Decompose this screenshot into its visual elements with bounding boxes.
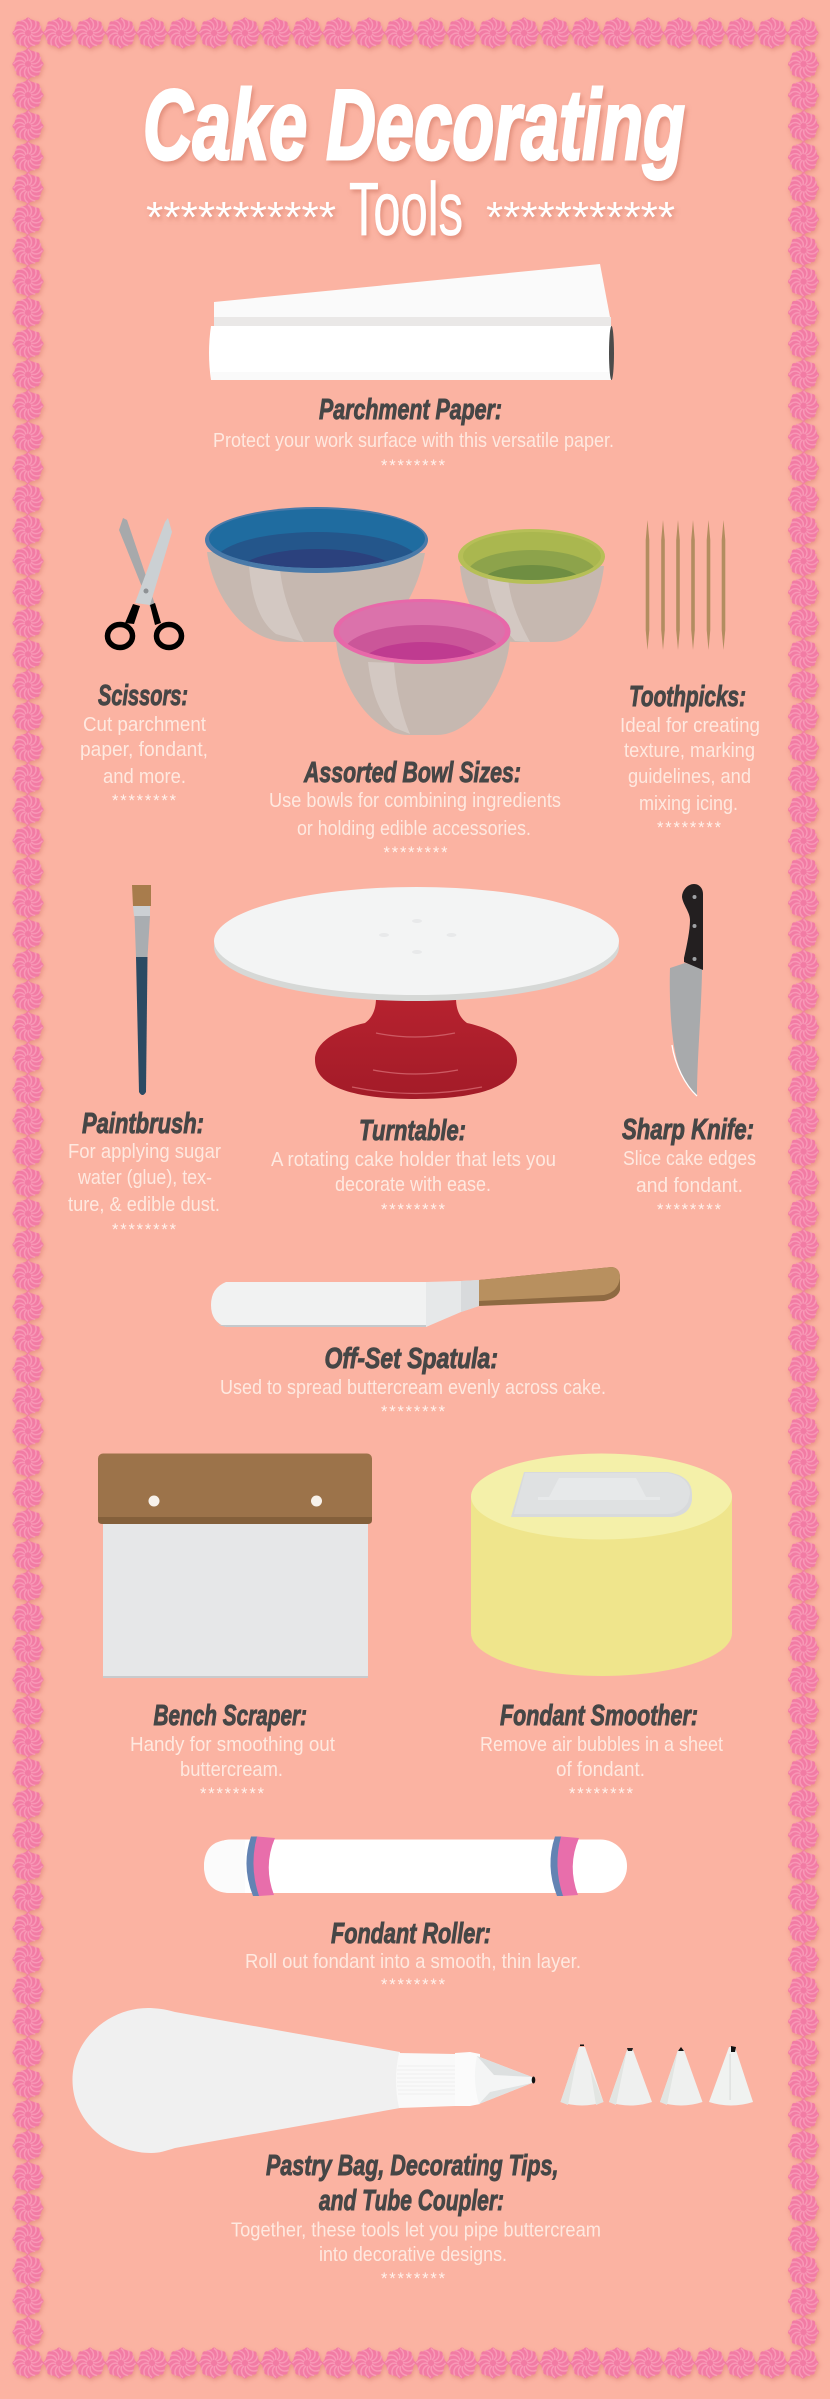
text block: Together, these tools let you pipe buttercream	[231, 2218, 601, 2242]
heading: and Tube Coupler:	[319, 2185, 504, 2217]
text block: Ideal for creating	[620, 714, 760, 737]
icon: bench scraper	[98, 1454, 372, 1678]
icon: scissors	[108, 518, 182, 648]
heading: Scissors:	[98, 680, 188, 712]
title: ***********	[486, 193, 675, 242]
text block: Remove air bubbles in a sheet	[480, 1733, 723, 1756]
icon: pastry bag with coupler	[72, 2008, 535, 2153]
text block: mixing icing.	[639, 792, 738, 815]
star divider: ********	[200, 1785, 265, 1803]
icon: knife	[670, 884, 703, 1096]
icon: parchment roll	[209, 264, 614, 380]
icon: decorating tips	[560, 2044, 753, 2106]
panel: paintbrush	[68, 885, 221, 1239]
heading: Fondant Roller:	[331, 1918, 491, 1950]
heading: Toothpicks:	[629, 681, 746, 713]
icon: turntable	[214, 887, 619, 1099]
text block: ture, & edible dust.	[68, 1193, 220, 1216]
panel: sharp knife	[622, 884, 756, 1219]
text block	[130, 1733, 335, 1781]
text block: Protect your work surface with this versatile paper.	[213, 429, 614, 452]
text block: into decorative designs.	[319, 2243, 507, 2266]
text block: buttercream.	[180, 1758, 283, 1781]
text block: Use bowls for combining ingredients	[269, 789, 561, 812]
heading: Pastry Bag, Decorating Tips,	[266, 2150, 558, 2182]
title: Tools	[349, 167, 463, 251]
text block	[231, 2218, 601, 2266]
panel: off-set spatula	[211, 1267, 620, 1421]
icon: green bowl	[458, 529, 605, 642]
panel: parchment paper	[209, 264, 614, 475]
star divider: ********	[112, 1221, 177, 1239]
panel: turntable	[214, 887, 619, 1219]
text block	[480, 1733, 723, 1781]
panel: bench scraper	[98, 1454, 372, 1803]
heading: Sharp Knife:	[622, 1114, 754, 1146]
text block: guidelines, and	[628, 765, 751, 788]
heading: Assorted Bowl Sizes:	[303, 757, 521, 789]
star divider: ********	[112, 792, 177, 810]
star divider: ********	[381, 2270, 446, 2288]
text block	[80, 713, 208, 788]
text block: and more.	[103, 765, 186, 788]
panel: toothpicks	[620, 520, 760, 837]
panel: assorted bowl sizes	[205, 507, 605, 862]
star divider: ********	[384, 844, 448, 862]
star divider: ********	[381, 1403, 446, 1421]
icon: toothpicks	[646, 520, 725, 650]
heading: Parchment Paper:	[319, 394, 502, 426]
text block: decorate with ease.	[335, 1173, 491, 1196]
star divider: ********	[381, 457, 446, 475]
text block	[271, 1148, 556, 1196]
star divider: ********	[657, 1201, 722, 1219]
text block	[623, 1147, 756, 1197]
text block: water (glue), tex-	[77, 1166, 212, 1189]
text block: A rotating cake holder that lets you	[271, 1148, 556, 1171]
heading: Turntable:	[359, 1115, 466, 1147]
text block: texture, marking	[624, 739, 755, 762]
panel: pastry bag, decorating tips, tube coupler	[72, 2008, 753, 2288]
text block: of fondant.	[556, 1758, 645, 1781]
text block: paper, fondant,	[80, 738, 208, 761]
panel: scissors	[80, 518, 208, 810]
icon: fondant-covered cake with smoother	[471, 1454, 732, 1676]
text block: Handy for smoothing out	[130, 1733, 335, 1756]
text block: or holding edible accessories.	[297, 817, 531, 840]
text block	[68, 1140, 221, 1216]
heading: Bench Scraper:	[154, 1700, 307, 1732]
star divider: ********	[381, 1201, 446, 1219]
icon: spatula	[211, 1267, 620, 1327]
panel: fondant smoother	[471, 1454, 732, 1803]
text block: Slice cake edges	[623, 1147, 756, 1170]
star divider: ********	[657, 819, 722, 837]
heading	[266, 2150, 558, 2217]
text block: and fondant.	[636, 1174, 743, 1197]
star divider: ********	[569, 1785, 634, 1803]
text block: Roll out fondant into a smooth, thin layer.	[245, 1950, 581, 1973]
text block: For applying sugar	[68, 1140, 221, 1163]
text block: Used to spread buttercream evenly across cake.	[220, 1376, 606, 1399]
heading: Paintbrush:	[82, 1108, 204, 1140]
icon: fondant roller	[204, 1836, 627, 1896]
text block	[620, 714, 760, 815]
heading: Off-Set Spatula:	[324, 1343, 498, 1375]
icon: paintbrush	[132, 885, 151, 1095]
star divider: ********	[381, 1976, 446, 1994]
panel: fondant roller	[204, 1836, 627, 1994]
heading: Fondant Smoother:	[500, 1700, 698, 1732]
icon: blue bowl	[205, 507, 428, 642]
text block	[269, 789, 561, 840]
text block: Cut parchment	[83, 713, 206, 736]
icon: pink bowl	[334, 599, 510, 735]
title	[143, 69, 685, 251]
title: ***********	[146, 193, 336, 242]
